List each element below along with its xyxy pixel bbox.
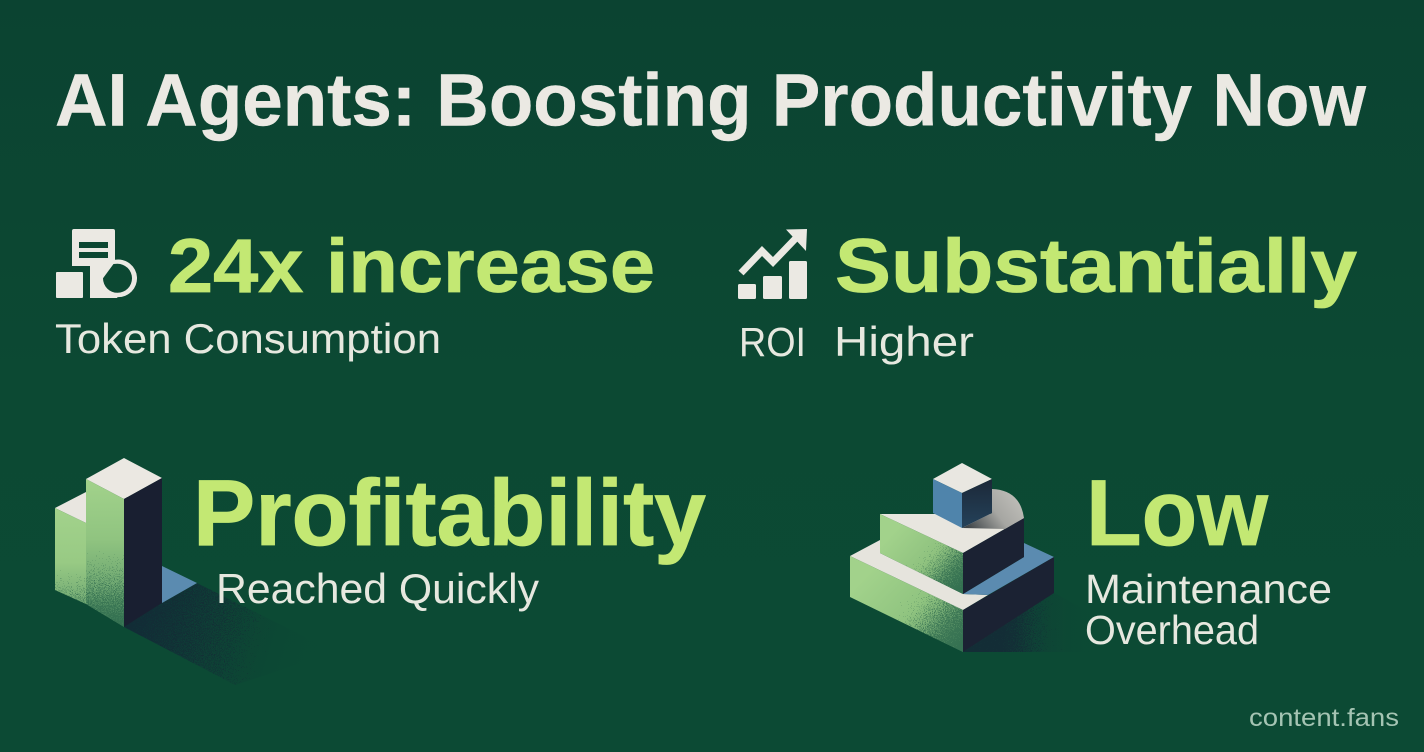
label: Higher: Higher (834, 318, 974, 365)
icon: rising bar chart with arrow (738, 229, 807, 299)
stat: Low: Low (1086, 460, 1269, 565)
panel: ROI (738, 224, 1357, 365)
stat: Substantially: Substantially (835, 224, 1357, 309)
icon: isometric stepped pyramid (850, 463, 1095, 652)
stat: Profitability: Profitability (193, 460, 706, 565)
label: Token Consumption: Token Consumption (55, 315, 441, 362)
stat: 24x increase: 24x increase (168, 224, 655, 309)
label: Overhead: Overhead (1085, 607, 1259, 653)
panel: maintenance (850, 460, 1332, 652)
icon: document, square and circle (56, 229, 137, 298)
panel: token consumption (55, 224, 655, 362)
icon: isometric columns (55, 458, 335, 685)
watermark: content.fans (1249, 704, 1399, 732)
title: AI Agents: Boosting Productivity Now (55, 58, 1366, 142)
label: Maintenance: Maintenance (1085, 566, 1332, 612)
label: ROI: ROI (739, 319, 806, 365)
label: Reached Quickly: Reached Quickly (216, 565, 539, 612)
panel: profitability (55, 458, 706, 685)
